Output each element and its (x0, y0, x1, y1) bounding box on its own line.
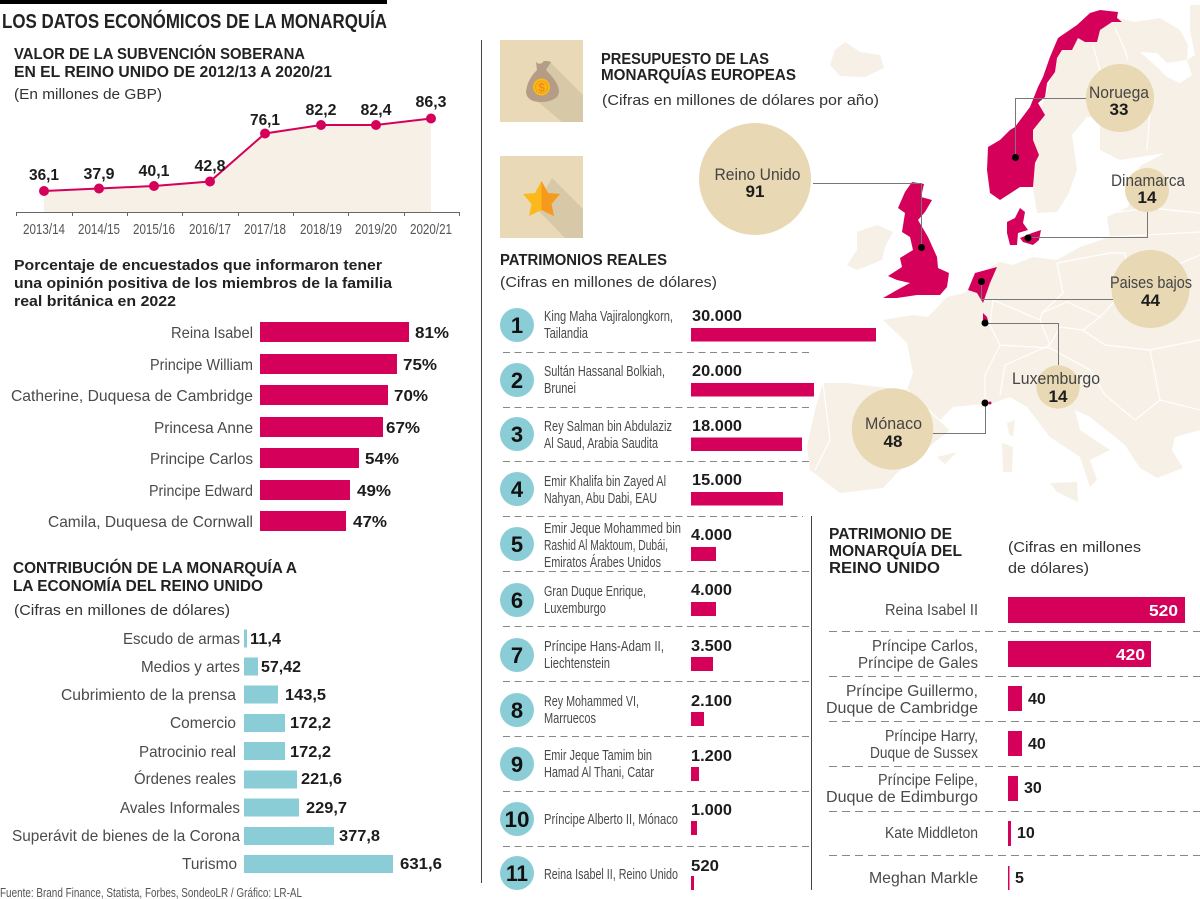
map callouts: 91 (746, 182, 764, 201)
line chart: subvención: 2017/18 (244, 222, 286, 238)
bar chart: contribución: 631,6 (400, 856, 442, 873)
ranking: patrimonios reales: Gran Duque Enrique, (544, 584, 646, 600)
ranking: patrimonios reales: 10 (504, 807, 530, 832)
map callouts: 33 (1110, 100, 1128, 119)
bar chart: opinión positiva: Principe Edward (149, 483, 253, 500)
bar chart: opinión positiva: Principe William (150, 357, 253, 374)
map: Europe (807, 5, 1200, 502)
ranking: patrimonios reales: Sultán Hassanal Bolkiah, (544, 364, 665, 380)
bar chart: patrimonio Reino Unido: Meghan Markle (869, 870, 978, 887)
ranking: patrimonios reales: Emir Jeque Mohammed bin (544, 521, 681, 537)
heading: patrimonios reales (500, 252, 717, 291)
line chart: subvención: 2015/16 (133, 222, 175, 238)
heading: encuesta: real británica en 2022 (14, 293, 176, 310)
ranking: patrimonios reales: 1.000 (691, 802, 732, 819)
ranking: patrimonios reales (500, 308, 876, 890)
bar chart: opinión positiva: Camila, Duquesa de Cornwall (48, 514, 253, 531)
heading: patrimonio monarquía Reino Unido: (Cifras en millones (1008, 539, 1141, 556)
line chart: subvención: 76,1 (250, 112, 280, 129)
ranking: patrimonios reales: 4 (511, 477, 524, 502)
heading: subvención soberana: EN EL REINO UNIDO DE 2012/13 A 2020/21 (14, 64, 332, 81)
bar chart: opinión positiva: Principe Carlos (150, 451, 253, 468)
ranking: patrimonios reales: Hamad Al Thani, Catar (544, 765, 654, 781)
heading: presupuesto (601, 51, 879, 109)
bar chart: contribución: Órdenes reales (134, 769, 236, 788)
bar chart: opinión positiva (11, 322, 449, 531)
ranking: patrimonios reales: Nahyan, Abu Dabi, EAU (544, 491, 657, 507)
heading: subvención soberana (14, 44, 332, 103)
bar chart: opinión positiva: 47% (353, 514, 387, 531)
ranking: patrimonios reales: Emiratos Árabes Unidos (544, 554, 661, 571)
heading: subvención soberana: (En millones de GBP) (14, 86, 162, 103)
heading: encuesta: Porcentaje de encuestados que informaron tener (14, 257, 382, 274)
line chart: subvención (16, 94, 460, 238)
heading: patrimonio monarquía Reino Unido: MONARQUÍA DEL (829, 543, 962, 560)
ranking: patrimonios reales: Príncipe Alberto II, Mónaco (544, 812, 678, 828)
ranking: patrimonios reales: 2.100 (691, 693, 732, 710)
ranking: patrimonios reales: 3.500 (691, 638, 732, 655)
icon: star (500, 156, 583, 238)
bar chart: opinión positiva: 75% (403, 357, 437, 374)
bar chart: patrimonio Reino Unido: 420 (1116, 647, 1145, 664)
ranking: patrimonios reales: 18.000 (692, 418, 742, 435)
ranking: patrimonios reales: Brunei (544, 381, 576, 397)
ranking: patrimonios reales: 5 (511, 532, 523, 557)
ranking: patrimonios reales: Emir Khalifa bin Zayed Al (544, 474, 666, 490)
map callouts: Noruega (1089, 84, 1150, 102)
ranking: patrimonios reales: 20.000 (692, 363, 742, 380)
line chart: subvención: 82,2 (306, 102, 337, 119)
ranking: patrimonios reales: 6 (511, 588, 523, 613)
bar chart: patrimonio Reino Unido: 40 (1028, 691, 1046, 708)
bar chart: contribución: 377,8 (339, 828, 380, 845)
heading: encuesta: una opinión positiva de los miembros de la familia (14, 275, 393, 292)
bar chart: contribución: Cubrimiento de la prensa (61, 687, 236, 704)
bar chart: patrimonio Reino Unido: Príncipe de Gales (858, 655, 978, 672)
ranking: patrimonios reales: 2 (511, 368, 523, 393)
bar chart: opinión positiva: 54% (365, 451, 399, 468)
line chart: subvención: 37,9 (84, 166, 115, 183)
map callouts: 44 (1141, 291, 1160, 310)
heading: presupuesto: (Cifras en millones de dólares por año) (602, 92, 879, 109)
map callouts: 14 (1049, 387, 1068, 406)
bar chart: contribución: Superávit de bienes de la Corona (12, 828, 240, 845)
bar chart: contribución: 11,4 (250, 631, 281, 648)
heading: contribución (13, 558, 297, 619)
ranking: patrimonios reales: Rey Salman bin Abdulaziz (544, 419, 672, 435)
bar chart: patrimonio Reino Unido: Príncipe Guillermo, (846, 683, 978, 700)
bar chart: opinión positiva: 70% (394, 388, 428, 405)
line chart: subvención: 36,1 (29, 167, 59, 184)
heading: presupuesto: MONARQUÍAS EUROPEAS (601, 65, 796, 84)
bar chart: opinión positiva: Princesa Anne (154, 420, 253, 437)
ranking: patrimonios reales: 4.000 (691, 582, 732, 599)
bar chart: contribución: Avales Informales (120, 800, 240, 817)
ranking: patrimonios reales: 7 (511, 643, 523, 668)
bar chart: opinión positiva: Reina Isabel (171, 325, 253, 342)
line chart: subvención: 2013/14 (23, 222, 65, 238)
bar chart: contribución: 221,6 (301, 771, 342, 788)
line chart: subvención: 82,4 (360, 102, 392, 119)
bar chart: patrimonio Reino Unido: Duque de Cambridge (826, 700, 978, 717)
bar chart: patrimonio Reino Unido: Duque de Sussex (870, 745, 978, 762)
ranking: patrimonios reales: 9 (511, 752, 523, 777)
line chart: subvención: 40,1 (138, 163, 170, 180)
ranking: patrimonios reales: Liechtenstein (544, 656, 610, 672)
ranking: patrimonios reales: 8 (511, 698, 523, 723)
bar chart: patrimonio Reino Unido: Príncipe Carlos, (872, 638, 978, 655)
bar chart: contribución: Escudo de armas (123, 631, 240, 648)
ranking: patrimonios reales: 1 (511, 313, 523, 338)
White Sea (1140, 52, 1192, 83)
ranking: patrimonios reales: Rashid Al Maktoum, Dubái, (544, 538, 668, 554)
title: LOS DATOS ECONÓMICOS DE LA MONARQUÍA (2, 9, 387, 33)
ranking: patrimonios reales: Emir Jeque Tamim bin (544, 748, 652, 764)
bar chart: opinión positiva: 49% (357, 483, 391, 500)
bar chart: contribución: 229,7 (306, 800, 347, 817)
line chart: subvención: 2019/20 (355, 222, 397, 238)
line chart: subvención: 2020/21 (410, 222, 452, 238)
bar chart: contribución: 172,2 (290, 744, 331, 761)
heading: contribución: CONTRIBUCIÓN DE LA MONARQUÍA A (13, 558, 297, 577)
bar chart: contribución: 143,5 (285, 687, 326, 704)
heading: contribución: (Cifras en millones de dólares) (14, 602, 230, 619)
icon: money bag: $ (538, 80, 545, 94)
ranking: patrimonios reales: Reina Isabel II, Reino Unido (544, 867, 678, 883)
bar chart: contribución: 57,42 (261, 659, 301, 676)
bar chart: contribución: Patrocinio real (139, 744, 236, 761)
ranking: patrimonios reales: Marruecos (544, 711, 596, 727)
ranking: patrimonios reales: 4.000 (691, 527, 732, 544)
bar chart: patrimonio Reino Unido: 5 (1015, 870, 1024, 887)
bar chart: patrimonio Reino Unido: Kate Middleton (885, 825, 978, 842)
line chart: subvención: 2018/19 (300, 222, 342, 238)
map callouts: Dinamarca (1111, 172, 1186, 190)
map callouts: Luxemburgo (1012, 370, 1100, 388)
heading: patrimonio monarquía Reino Unido: REINO UNIDO (829, 560, 940, 577)
map callouts: Reino Unido (714, 166, 800, 184)
icon: money bag (500, 40, 583, 122)
ranking: patrimonios reales: 11 (506, 861, 528, 886)
ranking: patrimonios reales: King Maha Vajiralongkorn, (544, 309, 673, 325)
line chart: subvención: 2014/15 (78, 222, 120, 238)
bar chart: patrimonio Reino Unido: 10 (1017, 825, 1035, 842)
ranking: patrimonios reales: 3 (511, 422, 523, 447)
map callouts: 48 (884, 432, 902, 451)
heading: contribución: LA ECONOMÍA DEL REINO UNIDO (13, 576, 263, 595)
line chart: subvención: 42,8 (194, 158, 226, 175)
bar chart: opinión positiva: 81% (415, 325, 449, 342)
ranking: patrimonios reales: Tailandia (544, 326, 589, 342)
ranking: patrimonios reales: Al Saud, Arabia Saudita (544, 436, 659, 452)
top rule (0, 0, 387, 4)
heading: subvención soberana: VALOR DE LA SUBVENCIÓN SOBERANA (14, 44, 305, 63)
ranking: patrimonios reales: Rey Mohammed VI, (544, 694, 639, 710)
ranking: patrimonios reales: 30.000 (692, 308, 742, 325)
map callouts (699, 64, 1192, 470)
bar chart: patrimonio Reino Unido: Príncipe Harry, (885, 728, 978, 745)
map callouts: Mónaco (865, 415, 922, 433)
bar chart: contribución: Medios y artes (141, 659, 240, 676)
bar chart: contribución: 172,2 (290, 715, 331, 732)
ranking: patrimonios reales: 520 (691, 858, 719, 875)
bar chart: patrimonio Reino Unido: 30 (1024, 780, 1042, 797)
bar chart: patrimonio Reino Unido: 520 (1149, 603, 1178, 620)
ranking: patrimonios reales: Luxemburgo (544, 601, 606, 617)
heading: encuesta (14, 257, 393, 310)
heading: presupuesto: PRESUPUESTO DE LAS (601, 51, 769, 68)
bar chart: patrimonio Reino Unido: 40 (1028, 736, 1046, 753)
heading: patrimonio monarquía Reino Unido: de dólares) (1008, 560, 1089, 577)
heading: patrimonio monarquía Reino Unido (829, 526, 1141, 577)
bar chart: patrimonio Reino Unido (826, 597, 1200, 890)
map callouts: 14 (1138, 188, 1157, 207)
ranking: patrimonios reales: 1.200 (691, 748, 732, 765)
bar chart: patrimonio Reino Unido: Reina Isabel II (885, 602, 978, 619)
heading: patrimonios reales: PATRIMONIOS REALES (500, 252, 667, 269)
bar chart: opinión positiva: 67% (386, 420, 420, 437)
ranking: patrimonios reales: Príncipe Hans-Adam II, (544, 639, 664, 655)
bar chart: contribución: Turismo (182, 856, 237, 873)
bar chart: patrimonio Reino Unido: Duque de Edimburgo (826, 789, 978, 806)
line chart: subvención: 86,3 (416, 94, 447, 111)
bar chart: opinión positiva: Catherine, Duquesa de Cambridge (11, 388, 253, 405)
heading: patrimonio monarquía Reino Unido: PATRIMONIO DE (829, 526, 952, 543)
line chart: subvención: 2016/17 (189, 222, 231, 238)
bar chart: contribución: Comercio (170, 715, 236, 732)
bar chart: contribución (12, 630, 442, 873)
heading: patrimonios reales: (Cifras en millones de dólares) (500, 274, 717, 291)
divider (482, 40, 812, 890)
bar chart: patrimonio Reino Unido: Príncipe Felipe, (878, 772, 978, 789)
ranking: patrimonios reales: 15.000 (692, 472, 742, 489)
